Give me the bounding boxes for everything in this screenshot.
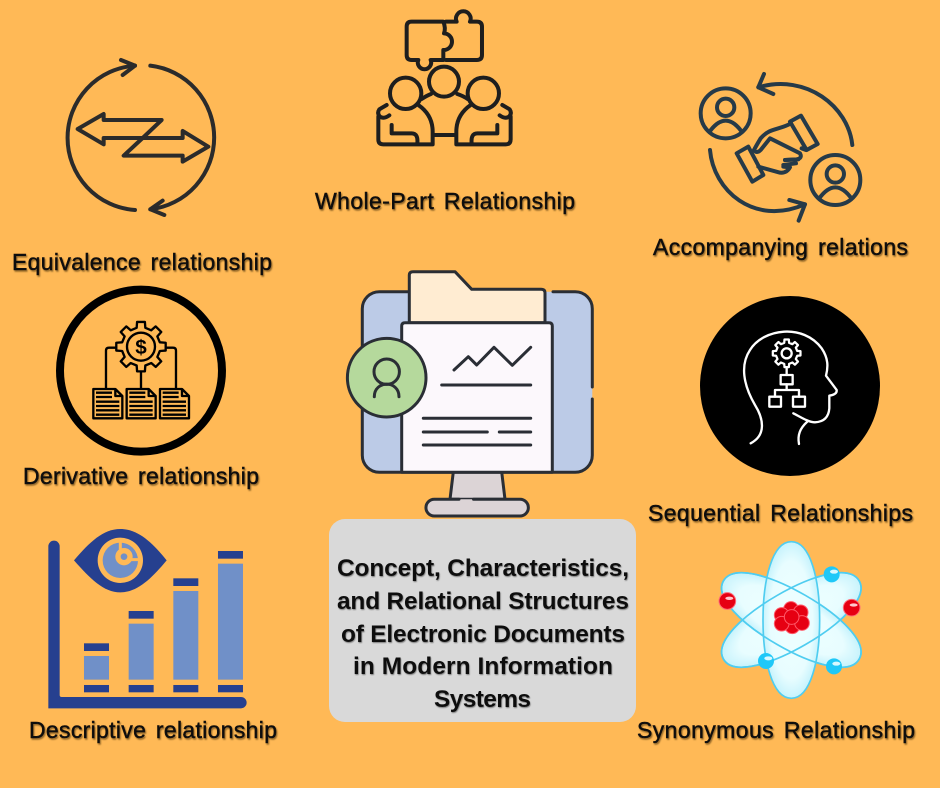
label: synonymous relationship: Synonymous Relationship bbox=[637, 717, 915, 743]
label: accompanying relations: Accompanying relations bbox=[653, 234, 908, 260]
document bbox=[402, 323, 552, 472]
icon: handshake and people bbox=[701, 74, 860, 221]
folder bbox=[409, 272, 545, 323]
title: Systems bbox=[434, 686, 531, 713]
icon: derivative ring with gear and documents: $ bbox=[135, 336, 147, 359]
title: of Electronic Documents bbox=[341, 621, 625, 648]
title: Concept, Characteristics, bbox=[337, 555, 629, 582]
label: equivalence relationship: Equivalence relationship bbox=[12, 249, 272, 275]
label: descriptive relationship: Descriptive relationship bbox=[29, 717, 277, 743]
icon: atom bbox=[709, 542, 873, 698]
title bbox=[337, 555, 629, 713]
icon: equivalence arrows bbox=[68, 60, 214, 215]
title panel bbox=[329, 519, 636, 722]
icon: team with puzzle bbox=[378, 11, 511, 144]
monitor base bbox=[426, 499, 528, 516]
icon: descriptive bar chart with eye bbox=[48, 529, 247, 708]
chart line bbox=[454, 347, 531, 370]
chart axes bbox=[48, 541, 247, 708]
title: in Modern Information bbox=[353, 653, 613, 680]
central illustration: monitor with document bbox=[347, 272, 592, 516]
title: and Relational Structures bbox=[337, 588, 629, 615]
user badge bbox=[347, 338, 426, 417]
label: sequential relationships: Sequential Relationships bbox=[648, 500, 913, 526]
electrons bbox=[719, 566, 860, 674]
icon: eye bbox=[74, 529, 167, 592]
label: whole-part relationship: Whole-Part Relationship bbox=[315, 188, 575, 214]
monitor screen bbox=[362, 292, 592, 472]
document text lines bbox=[423, 385, 531, 445]
label: derivative relationship: Derivative relationship bbox=[23, 463, 259, 489]
icon: brain head flow bbox=[700, 296, 880, 476]
bars bbox=[84, 551, 243, 692]
monitor stand bbox=[450, 472, 505, 499]
nucleus bbox=[774, 602, 809, 634]
icon: derivative ring with gear and documents bbox=[60, 290, 222, 452]
